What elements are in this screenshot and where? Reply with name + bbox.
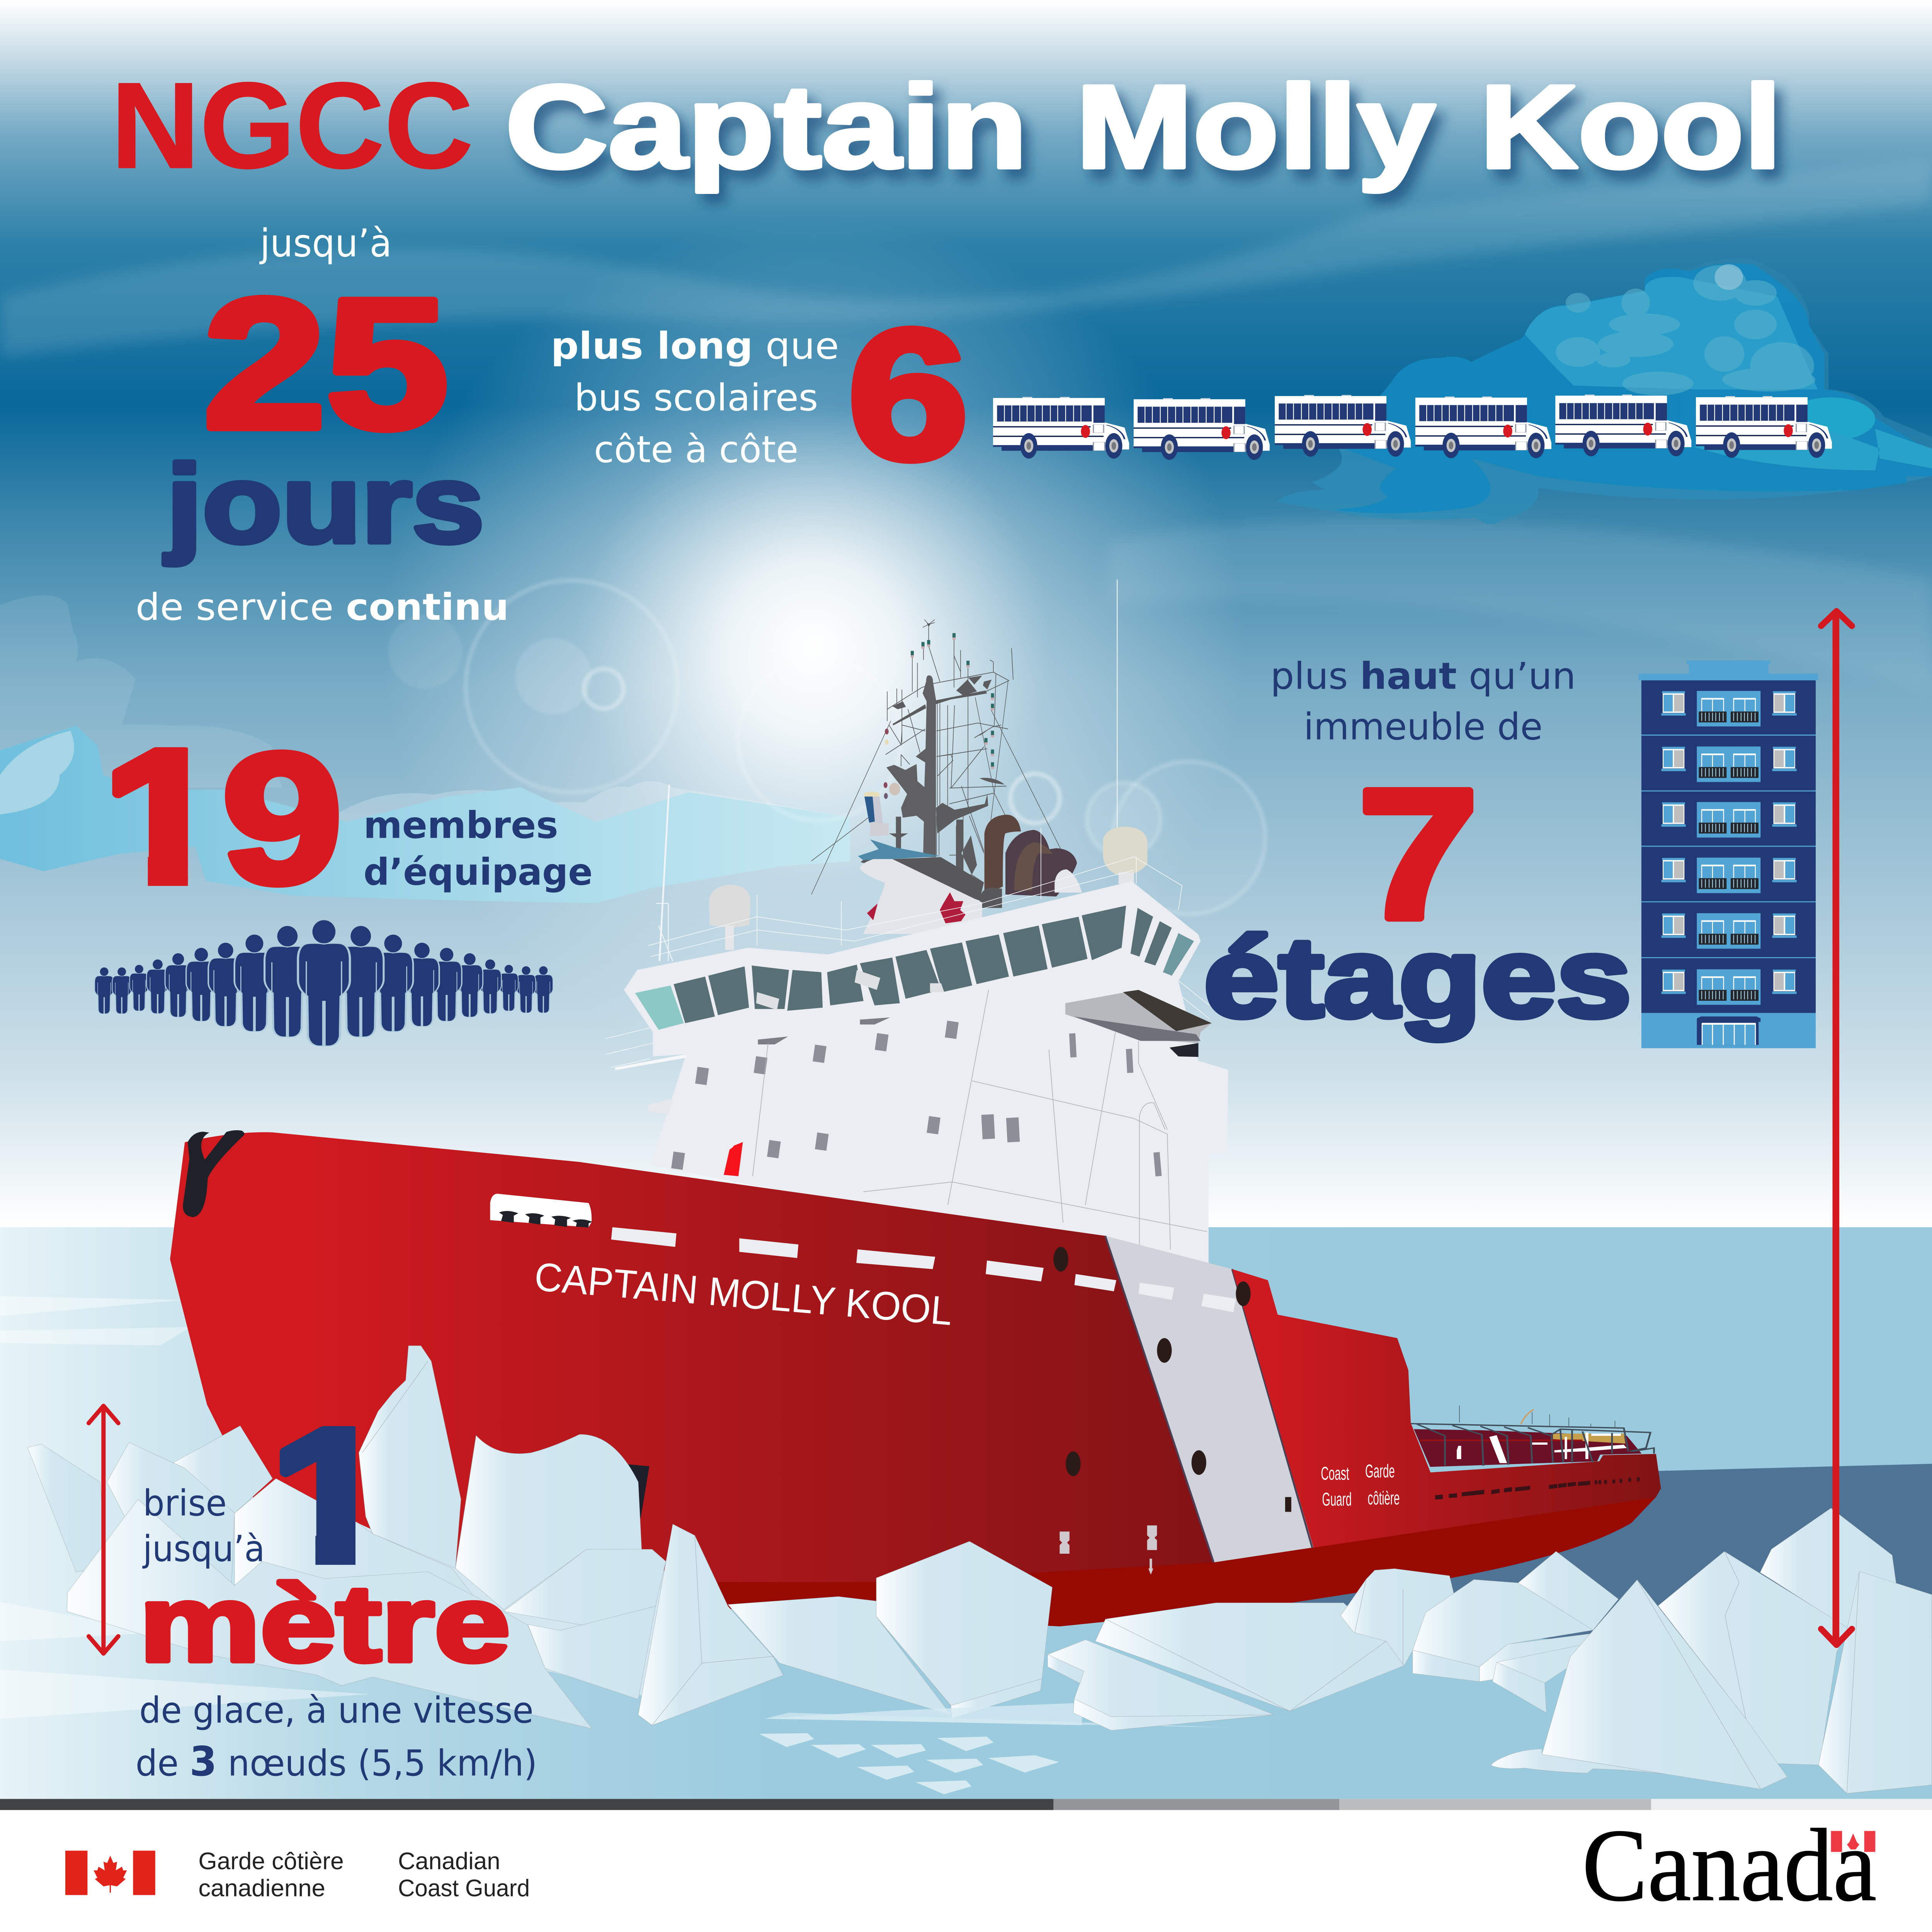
stat: 25 jours: 25 (203, 261, 449, 467)
searchlights (756, 970, 944, 1010)
stat: 19 crew: 9 (222, 715, 342, 922)
Coast Guard flag (65, 1851, 155, 1895)
stat: 7 floors: étages (1204, 914, 1631, 1041)
title: NGCC (111, 57, 473, 194)
title: Captain (505, 61, 1027, 194)
coast guard text: Garde (1365, 1461, 1395, 1481)
stat: 7 floors: immeuble de (1304, 705, 1543, 748)
stat: 1 metre icebreaking: de 3 nœuds (5,5 km/h) (136, 1738, 537, 1785)
mast and rigging (811, 619, 1082, 934)
mast main (886, 675, 936, 857)
arrow: ice thickness (89, 1406, 118, 1653)
stat: 7 floors: plus haut qu’un (1270, 655, 1576, 698)
stat: 6 buses text: plus long que (551, 324, 839, 367)
masthead instruments (911, 619, 994, 769)
side wing (1065, 990, 1212, 1057)
mast base (860, 859, 982, 934)
lattice (886, 624, 1013, 885)
hull draft marks (1060, 1526, 1157, 1575)
Coast Guard wordmark: Canadian (398, 1848, 500, 1874)
black port rectangle (1285, 1497, 1291, 1512)
bridge windows (635, 906, 1194, 1030)
Coast Guard wordmark: Garde côtière (198, 1848, 344, 1874)
stat: 7 floors (1204, 655, 1631, 1041)
Coast Guard wordmark (198, 1848, 530, 1902)
ship superstructure (605, 580, 1228, 1289)
icons: six school buses (993, 395, 1832, 460)
icon: seven-storey building (1639, 661, 1818, 1048)
portholes strip (1435, 1481, 1590, 1500)
stat: 1 metre icebreaking: mètre (139, 1563, 510, 1684)
wispy clouds in the sky (0, 160, 1932, 690)
title (111, 57, 1782, 194)
sun glow (382, 216, 1245, 1078)
small shades (758, 1017, 890, 1044)
footer (0, 1799, 1932, 1932)
Coast Guard wordmark: canadienne (198, 1875, 325, 1902)
stat: 1 metre icebreaking: de glace, à une vitesse (139, 1689, 534, 1731)
stat: 6 buses text: côte à côte (594, 428, 798, 471)
stat: 19 crew: 1 (103, 711, 226, 921)
stat: 25 jours: jours (164, 442, 484, 566)
signal light column (864, 728, 900, 837)
coast guard text (1321, 1461, 1400, 1510)
upper deck railings (605, 828, 1209, 1068)
lens flares (388, 580, 1265, 914)
stat: 25 jours: de service continu (136, 585, 509, 629)
bow fittings (183, 1130, 592, 1228)
hull portholes (1053, 1247, 1251, 1476)
Coast Guard wordmark: Coast Guard (398, 1875, 530, 1902)
ice floes small (759, 1703, 1082, 1794)
bow shadow notch (622, 1464, 649, 1518)
ice: left cluster (27, 1346, 1082, 1794)
small grey windows (671, 1021, 1162, 1177)
hull vent with bollards (490, 1194, 592, 1228)
white hull band (1105, 1236, 1312, 1562)
stat: 1 metre icebreaking: brise (143, 1482, 227, 1524)
stat: 1 metre icebreaking: jusqu’à (142, 1528, 265, 1570)
stat: 25 jours: jusqu’à (259, 221, 392, 265)
sea (0, 1227, 1932, 1799)
stat: 6 buses text: 6 (848, 291, 968, 498)
icon: crew of nineteen people (95, 920, 553, 1046)
title: Molly (1076, 61, 1436, 194)
stat: 19 crew: d’équipage (364, 850, 593, 894)
stat: 19 crew: membres (364, 803, 558, 847)
ice: right cluster (1048, 1508, 1932, 1793)
stat: 7 floors: 7 (1358, 751, 1479, 957)
stern (1232, 1269, 1661, 1548)
panel lines (753, 990, 1207, 1249)
cloud: upper right (1276, 258, 1932, 524)
coast guard text: côtière (1368, 1488, 1400, 1509)
stat: 6 buses text: bus scolaires (574, 376, 818, 419)
title: Kool (1480, 61, 1782, 193)
far dark water behind ship (1232, 1464, 1932, 1639)
coast guard text: Guard (1322, 1490, 1352, 1510)
clouds: left (0, 595, 850, 903)
red door (724, 1142, 743, 1176)
Canada wordmark: Canada (1582, 1808, 1877, 1922)
hull window bars (611, 1227, 1236, 1312)
anchor (183, 1130, 245, 1217)
aft deck with rails (1411, 1405, 1654, 1500)
bridge and house (624, 881, 1228, 1289)
rigging wires (811, 682, 1067, 895)
mast arms (889, 676, 1005, 883)
antennas (656, 580, 1117, 961)
funnels (980, 815, 1082, 908)
ship (170, 580, 1661, 1626)
hull main section (170, 1132, 1214, 1608)
coast guard text: Coast (1321, 1464, 1349, 1484)
sea ice wisps (0, 1296, 1232, 1728)
stat: 1 metre icebreaking: 1 (270, 1390, 394, 1600)
stat: 1 metre icebreaking (136, 1390, 537, 1785)
lower hull (690, 1497, 1656, 1626)
arrow: height (1821, 611, 1852, 1645)
radar domes (709, 827, 1147, 950)
stat: 6 buses text (551, 291, 968, 498)
stat: 25 jours (136, 221, 509, 629)
stat: 19 crew (103, 711, 593, 922)
ship name: CAPTAIN MOLLY KOOL (533, 1254, 954, 1333)
maple leaf marking (940, 892, 966, 923)
lower mast deck (861, 857, 984, 900)
sky background (0, 0, 1932, 1227)
